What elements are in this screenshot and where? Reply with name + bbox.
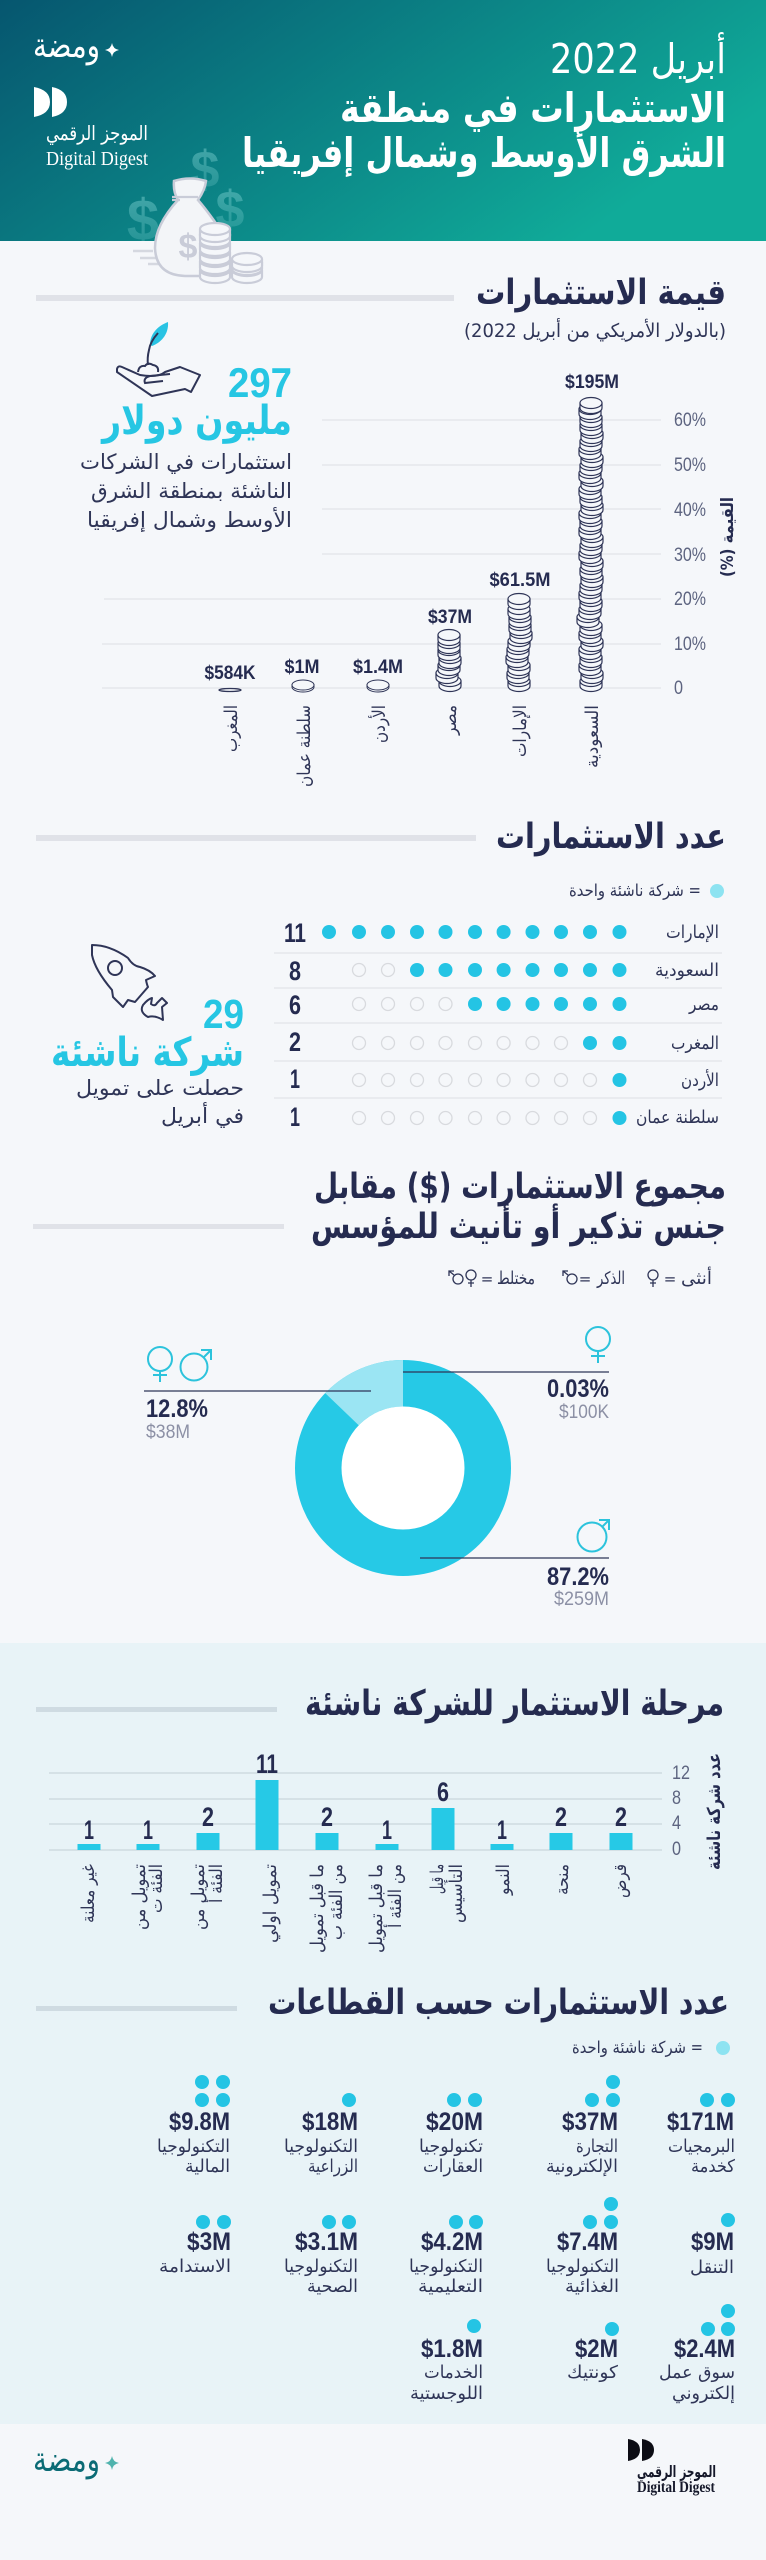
bar values: 1 xyxy=(143,1815,153,1845)
bar chart: funding stages: 12 xyxy=(672,1763,690,1784)
bar values: 2 xyxy=(321,1802,333,1832)
title xyxy=(242,32,726,178)
value labels: $584K xyxy=(204,663,256,684)
row: Morocco xyxy=(289,1027,719,1057)
stage labels: تمويل اولي xyxy=(261,1864,281,1943)
sector: e-labour market: سوق عمل xyxy=(659,2363,735,2383)
legend: gender symbols: أنثى xyxy=(681,1266,712,1289)
value labels: $37M xyxy=(428,607,472,628)
country labels: السعودية xyxy=(583,705,603,768)
coins: UAE xyxy=(506,594,532,692)
sector: edtech xyxy=(409,2215,483,2297)
sector: mobility: التنقل xyxy=(690,2258,734,2278)
sector: agritech: الزراعية xyxy=(308,2157,358,2177)
bars xyxy=(78,1780,632,1850)
row: Saudi Arabia: السعودية xyxy=(655,961,719,981)
logo: digital digest footer: الموجز الرقمي xyxy=(637,2462,716,2482)
row: Morocco: 2 xyxy=(289,1027,301,1057)
title: أبريل 2022 xyxy=(550,32,726,83)
stage labels xyxy=(79,1864,631,1953)
callout: mixed founders xyxy=(144,1347,371,1443)
icon: money bag with coins: $ xyxy=(179,228,198,266)
bar values: 6 xyxy=(437,1777,449,1807)
country labels xyxy=(222,705,603,787)
chart: dot matrix by country xyxy=(274,918,722,1132)
sector: fintech: المالية xyxy=(185,2157,230,2177)
donut chart: gender split xyxy=(295,1360,511,1576)
coins: Jordan xyxy=(367,680,389,692)
sector: edtech: التكنولوجيا xyxy=(409,2257,483,2277)
stage labels: ما قبل تمويل xyxy=(308,1864,328,1953)
callout: 297 million dollars: الأوسط وشمال إفريقيا xyxy=(87,507,292,533)
sector: agritech: $18M xyxy=(302,2108,358,2136)
sector: proptech: العقارات xyxy=(423,2157,483,2177)
country labels: سلطنة عمان xyxy=(295,705,315,787)
row: Egypt: 6 xyxy=(289,990,301,1020)
stage labels: الفئة أ xyxy=(204,1864,227,1903)
value labels: $1M xyxy=(284,657,320,678)
legend: gender symbols: = xyxy=(579,1270,591,1288)
logo: wamda footer: ومضة xyxy=(33,2440,100,2480)
axis title: value percent: القيمة (%) xyxy=(718,497,738,577)
heading: number of investments xyxy=(36,817,726,857)
sector: healthtech: الصحية xyxy=(307,2277,358,2297)
bar values: 1 xyxy=(497,1815,507,1845)
stage labels: الفئة ت xyxy=(147,1864,167,1913)
sector: e-commerce xyxy=(546,2075,620,2177)
sector: e-labour market: $2.4M xyxy=(674,2335,735,2363)
callout: 297 million dollars: 297 xyxy=(228,359,292,406)
heading: investments by sector xyxy=(36,1983,729,2023)
row: Morocco: المغرب xyxy=(671,1034,719,1054)
stage labels: تمويل من xyxy=(130,1864,150,1930)
callout: 29 startups xyxy=(51,991,244,1128)
header banner: $ xyxy=(191,141,220,199)
country labels: المغرب xyxy=(222,705,242,752)
callout: 29 startups: حصلت على تمويل xyxy=(76,1076,244,1100)
bar values xyxy=(84,1749,627,1845)
logo: digital digest header: Digital Digest xyxy=(46,148,148,170)
value labels: $61.5M xyxy=(490,570,550,591)
header banner: $ xyxy=(216,181,245,239)
legend: gender symbols: = xyxy=(664,1270,676,1288)
stage labels: ما قبل xyxy=(428,1864,448,1894)
bar values: 11 xyxy=(256,1749,278,1779)
stage labels: ما قبل تمويل xyxy=(367,1864,387,1953)
slice: mixed founders xyxy=(325,1360,403,1425)
chart: coin stacks by country: 60% xyxy=(674,410,706,431)
sector: SaaS: كخدمة xyxy=(691,2157,736,2177)
sector: agritech: التكنولوجيا xyxy=(284,2137,358,2157)
sector: mobility: $9M xyxy=(691,2228,734,2256)
sector: e-commerce: الإلكترونية xyxy=(546,2157,618,2177)
sector: edtech: $4.2M xyxy=(421,2228,483,2256)
header banner: $ xyxy=(127,188,159,253)
row: Oman xyxy=(290,1102,719,1132)
axis title: number of startups: عدد شركة ناشئة xyxy=(704,1753,725,1870)
heading: startup investment stage xyxy=(36,1684,724,1724)
heading: investment value xyxy=(36,273,726,313)
sector: e-commerce: $37M xyxy=(562,2108,618,2136)
sector: foodtech: التكنولوجيا xyxy=(546,2257,619,2277)
sector: healthtech: $3.1M xyxy=(295,2228,358,2256)
stage labels: من الفئة أ xyxy=(383,1864,406,1928)
chart: coin stacks by country: 10% xyxy=(674,634,706,655)
legend: gender symbols: = xyxy=(481,1270,493,1288)
callout: 297 million dollars xyxy=(80,359,292,533)
stage labels: تمويل من xyxy=(189,1864,209,1930)
coins: Saudi Arabia xyxy=(577,398,603,692)
icon: money bag with coins xyxy=(133,178,262,283)
row: UAE: الإمارات xyxy=(666,923,719,943)
country labels: مصر xyxy=(441,705,461,736)
bar chart: funding stages: 8 xyxy=(672,1788,681,1809)
sector: edtech: التعليمية xyxy=(418,2277,483,2297)
sector: SaaS: $171M xyxy=(667,2108,734,2136)
stage labels: منحة xyxy=(553,1864,573,1895)
row: Egypt: مصر xyxy=(688,995,719,1015)
bar values: 2 xyxy=(555,1802,567,1832)
sector: contech: $2M xyxy=(575,2335,618,2363)
row: Saudi Arabia: 8 xyxy=(289,956,301,986)
value labels: $195M xyxy=(565,372,619,393)
logo: digital digest footer xyxy=(628,2439,716,2496)
bar values: 2 xyxy=(202,1802,214,1832)
bar values: 1 xyxy=(84,1815,94,1845)
legend: one startup sectors: = شركة ناشئة واحدة xyxy=(572,2038,703,2058)
value labels: $1.4M xyxy=(353,657,403,678)
sector: fintech xyxy=(157,2075,230,2177)
sector: e-labour market: إلكتروني xyxy=(672,2384,735,2404)
row: Oman: سلطنة عمان xyxy=(636,1108,719,1128)
callout: male founders: $259M xyxy=(554,1589,609,1610)
sector: e-commerce: التجارة xyxy=(576,2137,618,2157)
coins: Oman xyxy=(292,680,314,692)
chart: coin stacks by country: 0 xyxy=(674,678,683,699)
subheading: in US dollars: (بالدولار الأمريكي من أبريل 2022) xyxy=(464,318,726,342)
panel: stage and sectors background xyxy=(0,1643,766,2424)
row: Egypt xyxy=(289,990,719,1020)
logo: digital digest header xyxy=(34,87,148,170)
row: Jordan: 1 xyxy=(290,1064,300,1094)
callout: male founders xyxy=(420,1520,609,1610)
value labels xyxy=(204,372,619,684)
sector: sustainability: $3M xyxy=(187,2228,231,2256)
bar chart: funding stages: 4 xyxy=(672,1813,681,1834)
callout: mixed founders: $38M xyxy=(146,1422,190,1443)
legend: gender symbols: مختلط xyxy=(497,1269,535,1289)
chart: coin stacks by country: 50% xyxy=(674,455,706,476)
sector: sustainability: الاستدامة xyxy=(159,2257,231,2277)
row: Jordan: الأردن xyxy=(681,1069,719,1091)
header banner xyxy=(0,0,766,253)
legend: gender symbols: الذكر xyxy=(596,1269,625,1289)
chart: coin stacks by country: 20% xyxy=(674,589,706,610)
sector: agritech xyxy=(284,2093,358,2177)
sector: mobility xyxy=(690,2213,735,2278)
legend: one startup: = شركة ناشئة واحدة xyxy=(569,881,701,901)
callout: 29 startups: 29 xyxy=(203,991,244,1037)
logo: digital digest footer: Digital Digest xyxy=(637,2479,716,2496)
callout: male founders: 87.2% xyxy=(547,1563,609,1591)
sector: healthtech xyxy=(284,2215,358,2297)
country labels: الأردن xyxy=(368,705,390,743)
bar values: 1 xyxy=(382,1815,392,1845)
sector: fintech: $9.8M xyxy=(169,2108,230,2136)
sector: logistics: الخدمات xyxy=(424,2363,483,2383)
callout: 297 million dollars: الناشئة بمنطقة الشرق xyxy=(91,479,292,503)
chart: coin stacks by country: 40% xyxy=(674,500,706,521)
chart: coin stacks by country: 30% xyxy=(674,545,706,566)
sector: proptech: $20M xyxy=(426,2108,483,2136)
sector: proptech xyxy=(419,2093,483,2177)
callout: 29 startups: شركة ناشئة xyxy=(51,1030,244,1076)
sector: sustainability xyxy=(159,2215,231,2277)
sector: proptech: تكنولوجيا xyxy=(419,2137,483,2157)
legend: gender symbols xyxy=(449,1266,712,1289)
bar values: 2 xyxy=(615,1802,627,1832)
icon: hand with seedling xyxy=(117,322,200,396)
row: UAE xyxy=(284,918,719,948)
row: Jordan xyxy=(290,1064,719,1094)
row: Oman: 1 xyxy=(290,1102,300,1132)
callout: 297 million dollars: مليون دولار xyxy=(100,398,292,444)
stage labels: النمو xyxy=(494,1864,514,1896)
coins: Morocco xyxy=(219,688,241,692)
bar chart: funding stages: 0 xyxy=(672,1839,681,1860)
stage labels: من الفئة ب xyxy=(327,1864,347,1940)
sector: e-labour market xyxy=(659,2304,735,2404)
sector: contech xyxy=(567,2322,619,2383)
sector: logistics: $1.8M xyxy=(421,2335,483,2363)
chart: coin stacks by country xyxy=(102,372,738,787)
callout: female founders: 0.03% xyxy=(547,1375,609,1403)
row: UAE: 11 xyxy=(284,918,306,948)
callout: female founders xyxy=(403,1327,610,1423)
logo: wamda header: ومضة xyxy=(33,26,100,66)
coins: Egypt xyxy=(436,630,461,692)
sector: foodtech: $7.4M xyxy=(557,2228,618,2256)
sector: SaaS: البرمجيات xyxy=(668,2137,735,2157)
callout: mixed founders: 12.8% xyxy=(146,1395,208,1423)
icon: rocket xyxy=(92,945,167,1020)
logo: digital digest header: الموجز الرقمي xyxy=(46,121,148,146)
sector: SaaS xyxy=(667,2093,736,2177)
callout: 29 startups: في أبريل xyxy=(161,1102,244,1128)
callout: female founders: $100K xyxy=(559,1402,609,1423)
stage labels: قرض xyxy=(611,1864,631,1898)
sector: healthtech: التكنولوجيا xyxy=(284,2257,358,2277)
sector: fintech: التكنولوجيا xyxy=(157,2137,230,2157)
stage labels: التأسيس xyxy=(444,1864,467,1923)
bar chart: funding stages xyxy=(49,1749,725,1953)
sector: foodtech xyxy=(546,2197,619,2297)
sector: logistics xyxy=(410,2319,483,2404)
heading: investments vs founder gender xyxy=(33,1167,726,1247)
callout: 297 million dollars: استثمارات في الشركات xyxy=(80,450,292,474)
sector: foodtech: الغذائية xyxy=(565,2277,619,2297)
sector: logistics: اللوجستية xyxy=(410,2384,483,2404)
row: Saudi Arabia xyxy=(289,956,719,986)
sector: contech: كونتيك xyxy=(567,2363,619,2383)
country labels: الإمارات xyxy=(511,705,531,757)
stage labels: غير معلنة xyxy=(79,1864,99,1923)
